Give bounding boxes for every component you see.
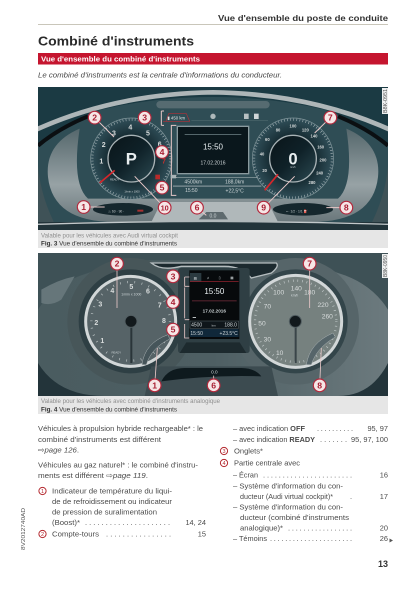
list item 1: [39, 486, 206, 527]
figure 3: Audi virtual cockpit: 40: [260, 152, 265, 157]
figure 3: Audi virtual cockpit: 0.0: [210, 213, 217, 219]
callout badges: 4: [171, 297, 176, 307]
figure 4: analog cluster: 140: [291, 285, 302, 292]
callout badges: 9: [261, 203, 266, 213]
tacho: [86, 276, 176, 366]
list item 3: 3: [222, 449, 226, 455]
figure 4: analog cluster: ▤: [194, 276, 198, 280]
figure 3: Audi virtual cockpit: 188,0km: [225, 179, 244, 185]
list item 1: Indicateur de température du liqui-: [52, 486, 173, 496]
callout badges: [111, 257, 326, 392]
list item 4: 20: [380, 524, 388, 532]
list item 2: . . . . . . . . . . . . . . . .: [106, 530, 171, 538]
list item 1: 1: [41, 489, 44, 495]
figure 4: analog cluster: 1/min x 1000: [121, 292, 141, 296]
list item 4: Partie centrale avec: [234, 458, 300, 468]
callout badges: 2: [92, 113, 97, 123]
list item 2: 2: [41, 532, 44, 538]
callout badges: 5: [171, 325, 176, 335]
caption fig 3: [38, 230, 388, 248]
figure 4: analog cluster: 50: [258, 320, 266, 327]
figure 3: Audi virtual cockpit: 160: [317, 145, 325, 150]
figure 3: Audi virtual cockpit: 120: [302, 128, 309, 133]
figure 4: analog cluster: READY: [111, 351, 121, 355]
figure 4: analog cluster: 220: [317, 302, 329, 309]
speedometer: [250, 275, 342, 367]
list item 4: analogique)*: [240, 524, 283, 532]
figure 3: Audi virtual cockpit: 4500km: [184, 179, 202, 185]
callout badges: 2: [115, 259, 120, 269]
figure 3: Audi virtual cockpit: 7: [162, 159, 166, 166]
right pod: [244, 269, 348, 373]
figure 4: analog cluster: 188.0: [224, 323, 237, 329]
figure 4: analog cluster: 17.02.2016: [203, 309, 226, 314]
figure 4: analog cluster: 3: [98, 302, 102, 309]
caption fig 4: [38, 396, 388, 414]
figure 3: Audi virtual cockpit: 15:50: [185, 188, 198, 194]
list item 1: de pression de suralimentation: [52, 508, 157, 516]
right column text: – avec indication OFF: [233, 424, 305, 433]
figure 3: Audi virtual cockpit: 1/min x 1000: [124, 189, 140, 193]
figure 4: analog cluster: km: [212, 323, 216, 327]
list item 1: . . . . . . . . . . . . . . . . . . . . .: [85, 518, 170, 527]
figure 4: analog cluster: ▯: [219, 276, 221, 280]
figure 4: analog cluster: 8: [162, 318, 166, 325]
callout badges: 10: [161, 203, 169, 212]
left column text: [38, 424, 206, 538]
callout badges: 8: [344, 203, 349, 213]
odometer: 0.0: [211, 370, 218, 375]
list item 4: . . . . . . . . . . . . . . . . . . . . . .: [270, 534, 352, 543]
right column text: . . . . . . .: [320, 435, 347, 444]
figure 3: Audi virtual cockpit: 0: [288, 149, 298, 168]
caption fig 3: Valable pour les véhicules avec Audi virtual cockpit: [41, 232, 178, 240]
right column text: . . . . . . . . . .: [317, 424, 353, 433]
list item 3: Onglets*: [234, 446, 263, 456]
title: Combiné d'instruments: [38, 34, 194, 48]
list item 1: 14, 24: [185, 518, 206, 527]
intro text: Le combiné d'instruments est la centrale d'informations du conducteur.: [38, 70, 282, 80]
figure 3: Audi virtual cockpit: 17.02.2016: [200, 161, 226, 167]
figure 3: Audi virtual cockpit: 240: [316, 170, 324, 175]
list item 2: 15: [198, 530, 206, 538]
left column text: ⇨page 126.: [38, 446, 79, 454]
page number: 13: [378, 559, 388, 569]
list item 4: . . . . . . . . . . . . . . . . .: [288, 524, 352, 532]
figure 3: Audi virtual cockpit: P: [126, 149, 137, 168]
central screen: [177, 126, 249, 174]
list item 2: [39, 530, 206, 538]
figure 4: analog cluster: 5: [129, 284, 133, 291]
callout badges: 6: [195, 203, 200, 213]
left column text: Véhicules au gaz naturel* : le combiné d'instru-: [38, 460, 199, 470]
list item 4: – Témoins: [233, 534, 267, 543]
figure 3: Audi virtual cockpit: 1: [99, 159, 103, 166]
list item 4: [220, 458, 393, 543]
left column text: Véhicules à propulsion hybride rechargeable* : le: [38, 424, 203, 433]
figure 4: analog cluster: 2: [94, 320, 98, 327]
left pod: [79, 269, 183, 373]
callout badges: 3: [171, 271, 176, 281]
figure 3: Audi virtual cockpit: 280: [309, 180, 316, 185]
bottom odometer tab: [199, 212, 228, 219]
callout badges: 7: [328, 113, 333, 123]
figure 3: Audi virtual cockpit: 140: [311, 134, 318, 139]
list item 4: 4: [222, 461, 226, 467]
figure 3: Audi virtual cockpit: [35, 87, 391, 230]
figure 4: analog cluster: 4500: [191, 323, 202, 329]
right column text: 95, 97, 100: [351, 435, 388, 444]
running header: Vue d'ensemble du poste de conduite: [218, 13, 388, 23]
callout badges: 7: [307, 259, 312, 269]
list item 4: – Écran: [233, 470, 258, 480]
left column text: ments est différent ⇨ page 119 .: [38, 471, 148, 480]
figure 4: analog cluster: 15:50: [204, 287, 225, 296]
list item 1: (Boost)*: [52, 518, 80, 527]
list item 4: 26: [380, 534, 388, 543]
list item 4: 16: [380, 470, 388, 480]
figure 4: analog cluster: ▦: [230, 276, 234, 280]
figure 3: Audi virtual cockpit: 100: [290, 123, 297, 128]
figure 4: analog cluster: 70: [264, 304, 271, 311]
figure 3: Audi virtual cockpit: 200: [320, 157, 327, 162]
callout badges: 1: [152, 380, 157, 390]
list item 4: .: [350, 492, 352, 501]
figure 4: analog cluster: 180: [304, 290, 316, 297]
bottom right strip: [273, 203, 333, 216]
section heading bar: [38, 53, 388, 64]
callout badges: 5: [160, 183, 165, 193]
image code fig 3: B8K-0951: [383, 89, 389, 113]
figure 4: analog cluster: +23.5°C: [220, 331, 238, 337]
image code fig 4: B8K-0950: [383, 255, 389, 277]
section heading bar: Vue d'ensemble du combiné d'instruments: [41, 55, 200, 64]
figure 4: analog cluster: 100: [273, 290, 285, 297]
document reference: 8V2012740AD: [21, 508, 27, 550]
figure 3: Audi virtual cockpit: ▮ 450 km: [167, 116, 186, 121]
driver information screen: [189, 270, 239, 339]
figure 3: Audi virtual cockpit: 5: [146, 130, 150, 137]
right column text: – avec indication READY: [233, 435, 315, 444]
callout badges: [77, 111, 353, 214]
figure 3: Audi virtual cockpit: km/h: [290, 167, 296, 169]
callout badges: 3: [142, 113, 147, 123]
figure 4: analog cluster: 15:50: [190, 331, 203, 337]
figure 4: analog cluster: km/h: [291, 293, 298, 297]
top central hood: [151, 263, 277, 278]
right column text: [220, 424, 393, 543]
callout badges: 1: [81, 202, 86, 212]
list item 3: [220, 446, 263, 456]
list item 2: Compte-tours: [52, 530, 99, 538]
list item 4: – Système d'information du con-: [233, 502, 344, 512]
bottom left strip: [93, 203, 153, 216]
figure 3: Audi virtual cockpit: READY: [110, 177, 119, 181]
right column text: 95, 97: [367, 424, 388, 433]
speedometer: [252, 118, 334, 199]
central top bar: [163, 114, 190, 121]
figure 4: analog cluster: 6: [146, 289, 150, 296]
figure 3: Audi virtual cockpit: +22,5°C: [226, 189, 244, 195]
list item 4: 17: [380, 492, 388, 501]
figure 3: Audi virtual cockpit: ▪ · 1/2 · 1/1 ⛽: [286, 208, 308, 213]
figure 3: Audi virtual cockpit: 2: [102, 142, 106, 149]
figure 4: analog cluster: 30: [264, 336, 271, 343]
info rows: [173, 176, 258, 179]
figure 4: analog cluster: 260: [322, 314, 333, 321]
caption fig 4: Valable pour les véhicules avec combiné d'instruments analogique: [41, 398, 221, 405]
list item 4: – Système d'information du con-: [233, 482, 344, 490]
caption fig 4: Fig. 4 Vue d'ensemble du combiné d'instruments: [41, 406, 177, 414]
callout badges: 4: [160, 147, 165, 157]
list item 4: ducteur (Audi virtual cockpit)*: [240, 492, 333, 501]
figure 3: Audi virtual cockpit: 4: [128, 125, 132, 132]
callout badges: 6: [211, 380, 216, 390]
tacho: [91, 118, 172, 199]
figure 3: Audi virtual cockpit: 80: [276, 128, 281, 133]
caption fig 3: Fig. 3 Vue d'ensemble du combiné d'instruments: [41, 240, 177, 248]
figure 4: analog cluster: 1: [100, 338, 104, 345]
callout badges: 8: [317, 380, 322, 390]
figure 4: analog cluster: ♫: [207, 276, 210, 280]
figure 3: Audi virtual cockpit: 3: [112, 130, 116, 137]
figure 3: Audi virtual cockpit: 20: [262, 168, 268, 173]
figure 3: Audi virtual cockpit: ♨ 60 · 90 ·: [108, 209, 124, 213]
left column text: combiné d'instruments est différent: [38, 435, 161, 444]
figure 4: analog cluster: [38, 253, 388, 396]
figure 3: Audi virtual cockpit: 60: [265, 137, 270, 142]
figure 3: Audi virtual cockpit: 6: [158, 141, 162, 148]
figure 3: Audi virtual cockpit: 15:50: [203, 142, 224, 151]
list item 1: de de refroidissement ou indicateur: [52, 497, 173, 506]
list item 4: ducteur (combiné d'instruments: [240, 513, 349, 522]
list item 4: . . . . . . . . . . . . . . . . . . . . . . .: [263, 470, 352, 480]
figure 4: analog cluster: 10: [276, 350, 284, 357]
figure 4: analog cluster: 4: [110, 288, 114, 295]
figure 4: analog cluster: 7: [158, 302, 162, 309]
